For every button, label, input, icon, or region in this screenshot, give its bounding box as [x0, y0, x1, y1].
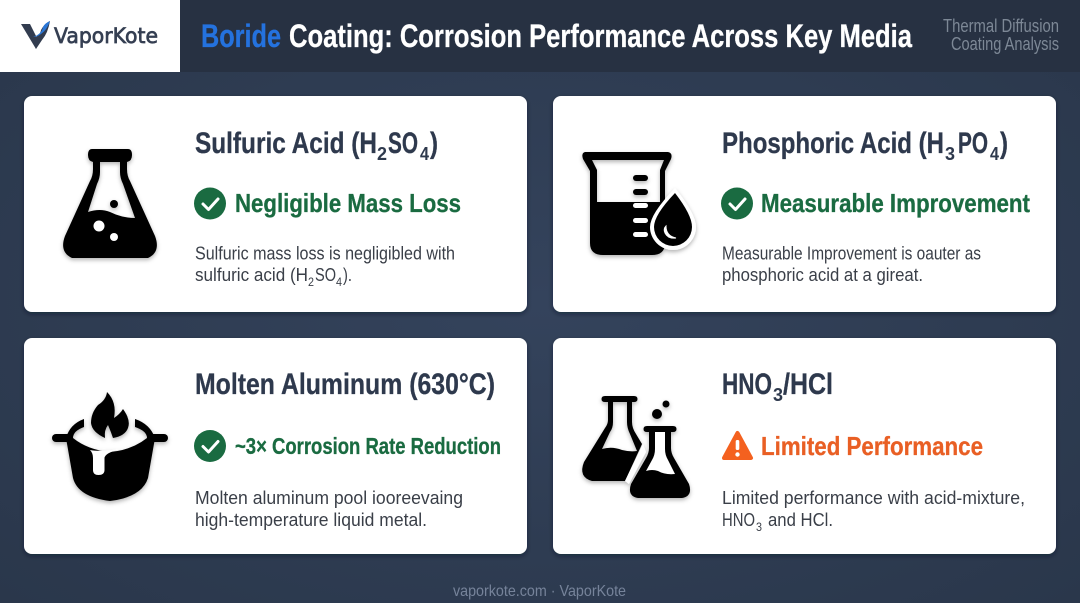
title: Boride — [201, 18, 281, 54]
description: Sulfuric mass loss is negligibled with — [195, 242, 455, 264]
description: Molten aluminum pool ioorееvaing — [195, 487, 463, 508]
description: and HCl. — [768, 509, 833, 530]
heading: 4 — [990, 144, 999, 164]
icon: flask — [63, 149, 157, 258]
heading: SO — [388, 127, 418, 160]
heading: 4 — [420, 144, 429, 164]
panel: molten aluminum — [24, 338, 527, 554]
description: Measurable Improvement is oauter as — [722, 242, 981, 264]
description — [722, 487, 1025, 534]
description: phosphoric acid at a gireat. — [722, 264, 923, 285]
logo panel — [0, 0, 180, 72]
heading: PO — [958, 127, 988, 160]
heading: Sulfuric Acid (H — [195, 127, 377, 160]
status: limited performance: Limited Performance — [761, 431, 983, 461]
description — [195, 487, 463, 530]
status: corrosion rate reduction: ~3× Corrosion Rate Reduction — [235, 433, 501, 459]
heading: /HCl — [783, 368, 833, 401]
panel: sulfuric acid — [24, 96, 527, 312]
title: Coating: Corrosion Performance Across Key Media — [289, 18, 912, 54]
header subtitle: Thermal Diffusion — [943, 16, 1059, 36]
description: 3 — [756, 520, 762, 534]
icon: two flasks — [582, 396, 690, 498]
heading: 2 — [377, 144, 387, 164]
description: ). — [343, 264, 352, 285]
icon: beaker with drop — [582, 152, 696, 255]
description — [195, 242, 455, 289]
status: negligible mass loss: Negligible Mass Loss — [235, 188, 461, 218]
description: SO — [315, 264, 336, 285]
panel: HNO3/HCl — [553, 338, 1056, 554]
heading: ) — [1000, 127, 1008, 160]
heading: ) — [430, 127, 438, 160]
status: corrosion rate reduction — [194, 430, 501, 462]
description: 4 — [336, 275, 342, 289]
description: HNO — [722, 509, 755, 530]
description: Limited performance with acid-mixture, — [722, 487, 1025, 508]
logo panel: VaporKote — [54, 24, 158, 48]
status: negligible mass loss — [194, 188, 461, 220]
heading: 3 — [945, 144, 955, 164]
panel: phosphoric acid — [553, 96, 1056, 312]
description — [722, 242, 981, 285]
header subtitle — [943, 16, 1059, 54]
heading — [722, 368, 833, 405]
status: measurable improvement: Measurable Improvement — [761, 188, 1030, 218]
description: sulfuric acid (H — [195, 264, 308, 285]
description: 2 — [308, 275, 314, 289]
heading: Molten Aluminum (630°C) — [195, 368, 495, 401]
heading: HNO — [722, 368, 772, 401]
header bar — [0, 0, 1080, 72]
footer: vaporkote.com · VaporKote — [453, 583, 626, 600]
heading: Phosphoric Acid (H — [722, 127, 944, 160]
heading: 3 — [773, 385, 783, 405]
icon: crucible with flame — [52, 392, 168, 501]
description: high-temperature liquid metal. — [195, 509, 427, 530]
